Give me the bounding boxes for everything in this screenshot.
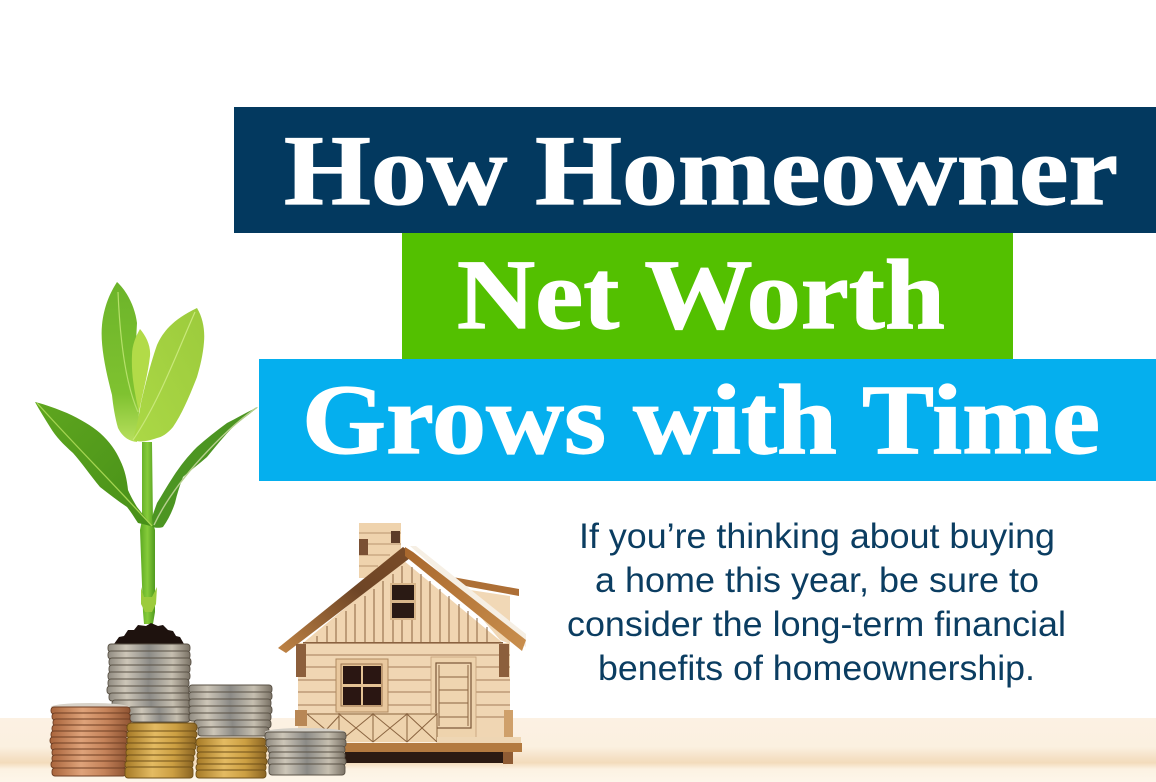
intro text block: a home this year, be sure to [595, 561, 1039, 600]
title banner: Grows with Time: Grows with Time [302, 364, 1100, 475]
soil mound [114, 623, 184, 644]
title banner: Net Worth: Net Worth [457, 239, 945, 350]
intro text block: If you’re thinking about buying [579, 517, 1055, 556]
icon: model wooden house [278, 523, 526, 764]
coin stack: low silver [265, 728, 346, 775]
title banner: How Homeowner: How Homeowner [284, 115, 1118, 226]
wooden table surface [0, 718, 1156, 782]
porch post [504, 710, 513, 743]
title banner: Net Worth [402, 233, 1013, 359]
lower window [336, 659, 388, 712]
upper window [390, 583, 416, 620]
coin stack: copper [50, 703, 131, 776]
icon: plant seedling [35, 282, 258, 624]
intro text block [567, 517, 1066, 688]
porch railing [295, 710, 437, 742]
coin stack: right gold [196, 738, 267, 778]
intro text block: consider the long-term financial [567, 605, 1066, 644]
coin stack: medium silver [189, 685, 272, 736]
coin stack: left gold [125, 723, 197, 778]
coin stack: tall silver [107, 644, 191, 722]
side wing [447, 576, 519, 644]
back roof slope [410, 546, 526, 647]
gable and wall [298, 560, 510, 740]
wall corner trim [296, 644, 509, 677]
door [431, 657, 476, 740]
deck [345, 737, 522, 764]
chimney [359, 523, 401, 578]
intro text block: benefits of homeownership. [598, 649, 1035, 688]
roof [278, 547, 526, 653]
